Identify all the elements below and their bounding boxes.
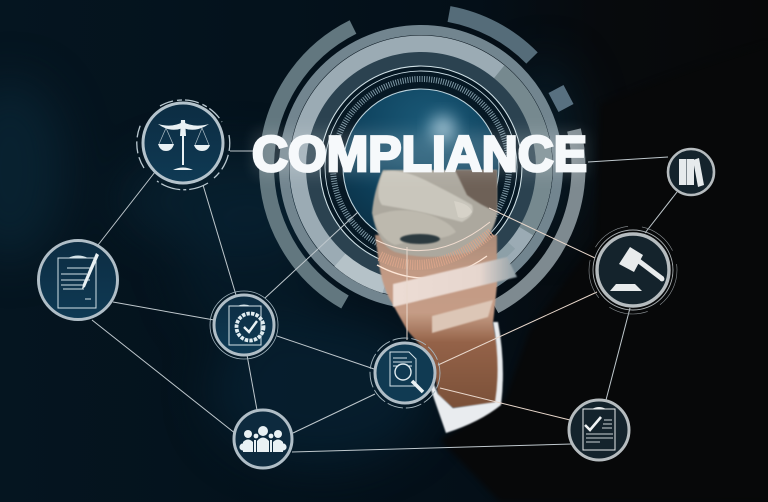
icon: scales of justice [137, 100, 230, 190]
icon: clipboard with gear check [210, 291, 278, 359]
forearm [375, 235, 501, 408]
inner lens [320, 66, 522, 268]
right network lines over hand [407, 208, 597, 420]
central target rings [267, 14, 579, 307]
icon: checklist report [569, 400, 629, 460]
outer arc segments [267, 14, 579, 307]
icon: books [668, 149, 714, 195]
pale translucent band lower [432, 300, 493, 333]
striped wrist overlay [380, 232, 492, 265]
icon: people group [234, 410, 292, 468]
middle finger [374, 210, 456, 245]
thumb [455, 170, 497, 212]
title glow [255, 132, 585, 174]
title: COMPLIANCE [252, 126, 587, 182]
index finger [378, 171, 473, 222]
icon: document and pen [38, 240, 118, 320]
pale translucent band upper [393, 257, 517, 307]
fist [372, 170, 497, 257]
shadow between fingers and wrist [400, 234, 440, 244]
network lines [92, 151, 677, 452]
gray band [284, 30, 558, 304]
background glow [0, 60, 585, 465]
dark band [313, 59, 529, 275]
hand [372, 170, 517, 408]
icon: document magnifier [370, 338, 440, 408]
icon: gavel [589, 226, 677, 314]
suit [440, 44, 768, 502]
light band [298, 44, 544, 290]
shirt cuff [423, 322, 503, 433]
fingernail [454, 201, 472, 218]
